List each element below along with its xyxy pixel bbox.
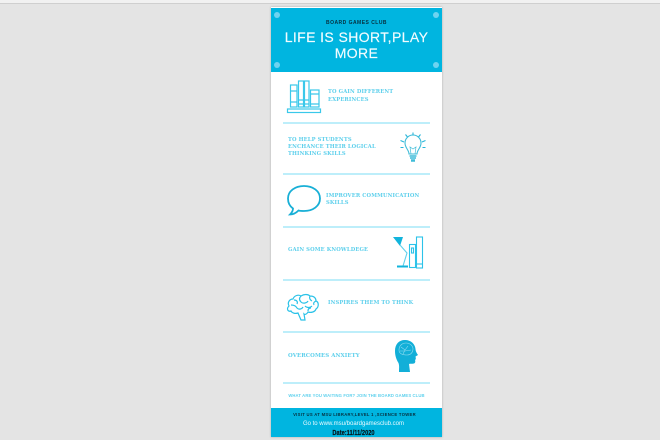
text: anxiety: OVERCOMES ANXIETY [288, 353, 360, 359]
text: logical thinking: THINKING SKILLS [288, 151, 346, 157]
text: communication [326, 192, 420, 206]
icon: brain [286, 294, 319, 321]
icon: books [286, 80, 322, 114]
club name: BOARD GAMES CLUB [326, 20, 387, 26]
icon: lamp and books [393, 236, 424, 269]
text: communication: IMPROVER COMMUNICATION [326, 192, 419, 198]
text: communication: SKILLS [326, 200, 349, 206]
footer date: Date:11/11/2020 [332, 428, 375, 437]
header corner dots [274, 12, 439, 68]
text: logical thinking: TO HELP STUDENTS [288, 136, 352, 142]
text: experiences: EXPERINCES [328, 96, 369, 102]
footer website: Go to www.msu/boardgamesclub.com [303, 421, 404, 427]
browser top bar [0, 0, 660, 4]
title: MORE [335, 44, 378, 60]
icon: head with brain [395, 340, 418, 372]
text: logical thinking [288, 136, 376, 157]
title [285, 29, 428, 60]
header band [271, 8, 442, 72]
text: experiences: TO GAIN DIFFERENT [328, 89, 393, 95]
icon: light bulb [400, 132, 426, 162]
text: experiences [328, 89, 394, 102]
footer band [271, 408, 442, 437]
icon: speech bubble [287, 185, 321, 216]
text: logical thinking: ENCHANCE THEIR LOGICAL [288, 144, 376, 150]
text: think: INSPIRES THEM TO THINK [328, 300, 413, 306]
text: knowledge: GAIN SOME KNOWLDEGE [288, 247, 368, 253]
poster page [271, 7, 442, 437]
footer location: VISIT US AT MSU LIBRARY,LEVEL 1 ,SCIENCE TOWER [293, 412, 416, 417]
title: LIFE IS SHORT,PLAY [285, 29, 428, 45]
call to action: WHAT ARE YOU WAITING FOR? JOIN THE BOARD GAMES CLUB [288, 393, 425, 398]
